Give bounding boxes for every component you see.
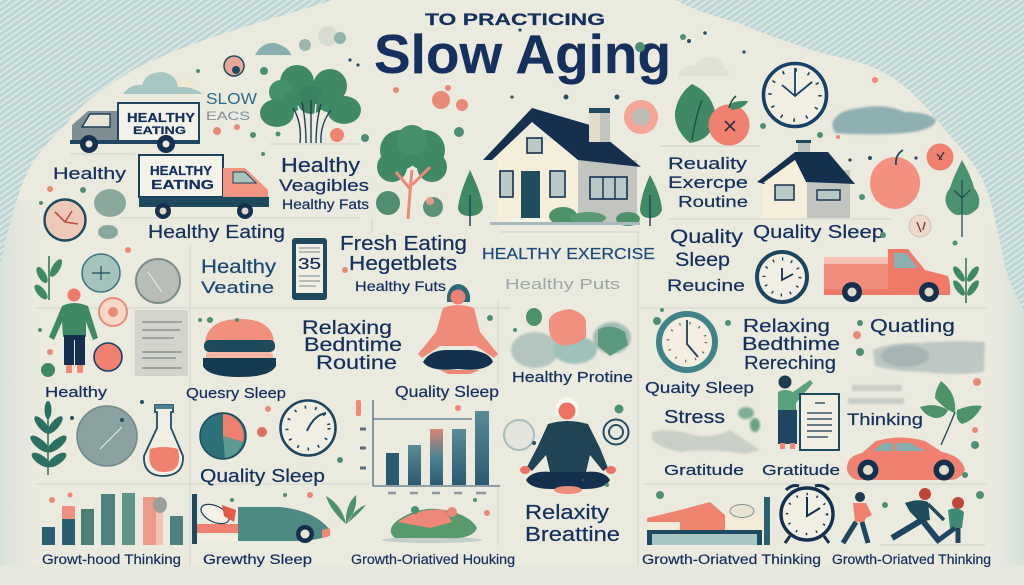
icon: cloud puff top middle <box>255 26 346 55</box>
text block: healthy vegetables <box>279 155 369 212</box>
icon: small apple <box>926 144 954 170</box>
label: gratitude two: Gratitude <box>762 462 840 479</box>
icon: coral badge <box>624 100 658 134</box>
label: healthy bottom left: Healthy <box>45 384 108 401</box>
text block: relaxing bedntime routine: Relaxing <box>302 318 392 339</box>
icon: cookie <box>909 215 931 237</box>
scattered specks <box>38 28 984 517</box>
icon: conifer right of house <box>640 175 662 226</box>
icon: person at board <box>778 376 813 449</box>
icon: large apple <box>870 150 920 209</box>
icon: small tree <box>376 125 447 219</box>
text block: reuality exercpe routine: Exercpe <box>668 173 748 192</box>
text block: relaxity breattine: Breattine <box>525 524 620 546</box>
icon: bed car <box>192 494 330 544</box>
text block: fresh eating: Fresh Eating <box>340 233 467 255</box>
icon: truck two: HEALTHY <box>150 164 213 178</box>
icon: coral bug <box>257 427 267 437</box>
label: slow: SLOW <box>206 91 258 108</box>
title: Slow Aging <box>374 23 671 85</box>
icon: truck one: EATING <box>133 125 186 137</box>
label: growth oriatved thinking one: Growth-Oriatved Thinking <box>642 552 821 567</box>
bar chart: bottom left <box>42 493 183 545</box>
label: growth oriatived houking: Growth-Oriatived Houking <box>351 552 515 567</box>
label: quaity sleep: Quaity Sleep <box>645 380 754 397</box>
icon: gray dial <box>136 259 180 303</box>
label: healthy veatine: Veatine <box>201 278 274 297</box>
label: quality sleep large: Quality Sleep <box>200 466 325 486</box>
icon: dial left of woman <box>504 420 534 450</box>
dividers <box>35 154 987 566</box>
icon: phone with number: 35 <box>298 256 321 273</box>
icon: teal dial <box>82 254 120 292</box>
icon: protein food group <box>511 308 631 368</box>
label: quesry sleep: Quesry Sleep <box>186 385 286 402</box>
text block: relaxing bedntime routine <box>302 318 402 374</box>
icon: gray clock <box>77 406 137 466</box>
icon: teal wall clock <box>659 314 715 370</box>
label: quality sleep heading: Quality Sleep <box>753 222 884 242</box>
icon: truck one: HEALTHY <box>127 110 195 125</box>
icon: plant left <box>32 256 64 301</box>
icon: small house <box>757 140 855 218</box>
label: eacs: EACS <box>206 109 250 123</box>
icon: scribble texture stress <box>652 407 760 454</box>
icon: meditating woman <box>520 397 616 494</box>
icon: leaf sprig <box>920 381 982 445</box>
icon: phone with number <box>292 238 327 300</box>
label: healthy puts: Healthy Puts <box>505 276 620 293</box>
label: thinking: Thinking <box>847 410 923 429</box>
striped corner: top right <box>675 0 1024 310</box>
label: grewthy sleep: Grewthy Sleep <box>203 552 312 567</box>
label: growth oriatved thinking two: Growth-Oriatved Thinking <box>832 552 991 567</box>
icon: conifer left of house <box>458 170 483 226</box>
text block: quality sleep reucine <box>667 227 745 295</box>
label: healthy protine: Healthy Protine <box>512 369 633 386</box>
text block: healthy vegetables: Healthy <box>281 155 360 177</box>
icon: truck one <box>70 103 200 153</box>
icon: target right of woman <box>604 420 628 444</box>
icon: alarm clock <box>781 486 833 543</box>
text block: healthy vegetables: Veagibles <box>279 176 369 195</box>
icon: large wall clock <box>764 64 826 126</box>
text block: quality sleep reucine: Sleep <box>675 250 730 271</box>
text block: relaxing bedthime rereching <box>742 316 840 373</box>
label: stress: Stress <box>664 407 725 427</box>
icon: meditating figure coral <box>418 284 498 374</box>
label: quality sleep center: Quality Sleep <box>395 384 499 401</box>
icon: coral target discs <box>41 298 127 377</box>
label: growth hood thinking: Growt-hood Thinking <box>42 552 181 567</box>
icon: smudged text right <box>848 385 904 404</box>
icon: right tree <box>945 160 979 237</box>
text block: relaxity breattine <box>525 502 620 546</box>
icon: red pickup truck <box>824 249 950 302</box>
icon: gauge clock <box>280 400 336 456</box>
icon: plant right <box>951 258 981 303</box>
icon: leaf and apple <box>660 84 760 146</box>
icon: stacked burger <box>203 319 276 377</box>
icon: pale cloud <box>678 57 729 76</box>
icon: bed <box>647 497 770 545</box>
bar chart <box>356 400 500 493</box>
icon: runners <box>843 488 985 545</box>
icon: leaf pair <box>326 495 366 524</box>
label: gratitude one: Gratitude <box>664 462 744 479</box>
icon: pie chart <box>200 413 246 459</box>
text block: fresh eating <box>340 233 467 294</box>
icon: flask <box>144 405 183 476</box>
label: healthy veatine: Healthy <box>201 257 277 278</box>
text block: relaxing bedthime rereching: Relaxing <box>743 316 830 336</box>
icon: clock with faint face <box>44 200 86 240</box>
icon: gray blue smear <box>832 106 936 134</box>
icon: green coral heap <box>382 509 482 543</box>
icon: truck two <box>139 155 269 219</box>
text block: relaxing bedntime routine: Routine <box>316 353 397 374</box>
icon: gray smear right <box>873 341 985 374</box>
icon: document board <box>800 394 839 450</box>
text block: fresh eating: Hegetblets <box>349 253 457 275</box>
text block: relaxing bedthime rereching: Bedthime <box>742 334 840 354</box>
text block: relaxing bedthime rereching: Rereching <box>744 353 836 373</box>
label: healthy veatine <box>201 257 277 297</box>
label: healthy eating: Healthy Eating <box>148 222 285 242</box>
icon: large house <box>483 108 641 226</box>
icon: small clock top <box>224 56 244 76</box>
label: healthy exercise: HEALTHY EXERCISE <box>482 246 655 263</box>
text block: reuality exercpe routine: Routine <box>678 194 748 211</box>
text block: healthy vegetables: Healthy Fats <box>282 197 369 212</box>
icon: big leafy tree <box>260 65 361 144</box>
icon: plant row three <box>28 401 69 475</box>
panel: document <box>135 310 188 376</box>
text block: fresh eating: Healthy Futs <box>355 278 446 294</box>
title: TO PRACTICING <box>425 10 605 29</box>
icon: standing person <box>49 288 98 373</box>
icon: red car <box>847 438 965 480</box>
striped corner: top left <box>0 0 333 265</box>
text block: reuality exercpe routine <box>668 154 748 211</box>
text block: quality sleep reucine: Quality <box>670 227 744 248</box>
icon: truck two: EATING <box>151 178 214 192</box>
icon: round clock middle right <box>757 252 807 302</box>
icon: top left cloud and sun <box>123 72 203 98</box>
text block: relaxity breattine: Relaxity <box>525 502 609 524</box>
label: quatling: Quatling <box>870 316 955 336</box>
icon: gray green bush <box>94 189 126 239</box>
label: healthy: Healthy <box>53 164 127 183</box>
text block: reuality exercpe routine: Reuality <box>668 154 748 173</box>
text block: relaxing bedntime routine: Bedntime <box>304 335 402 356</box>
text block: quality sleep reucine: Reucine <box>667 276 745 295</box>
